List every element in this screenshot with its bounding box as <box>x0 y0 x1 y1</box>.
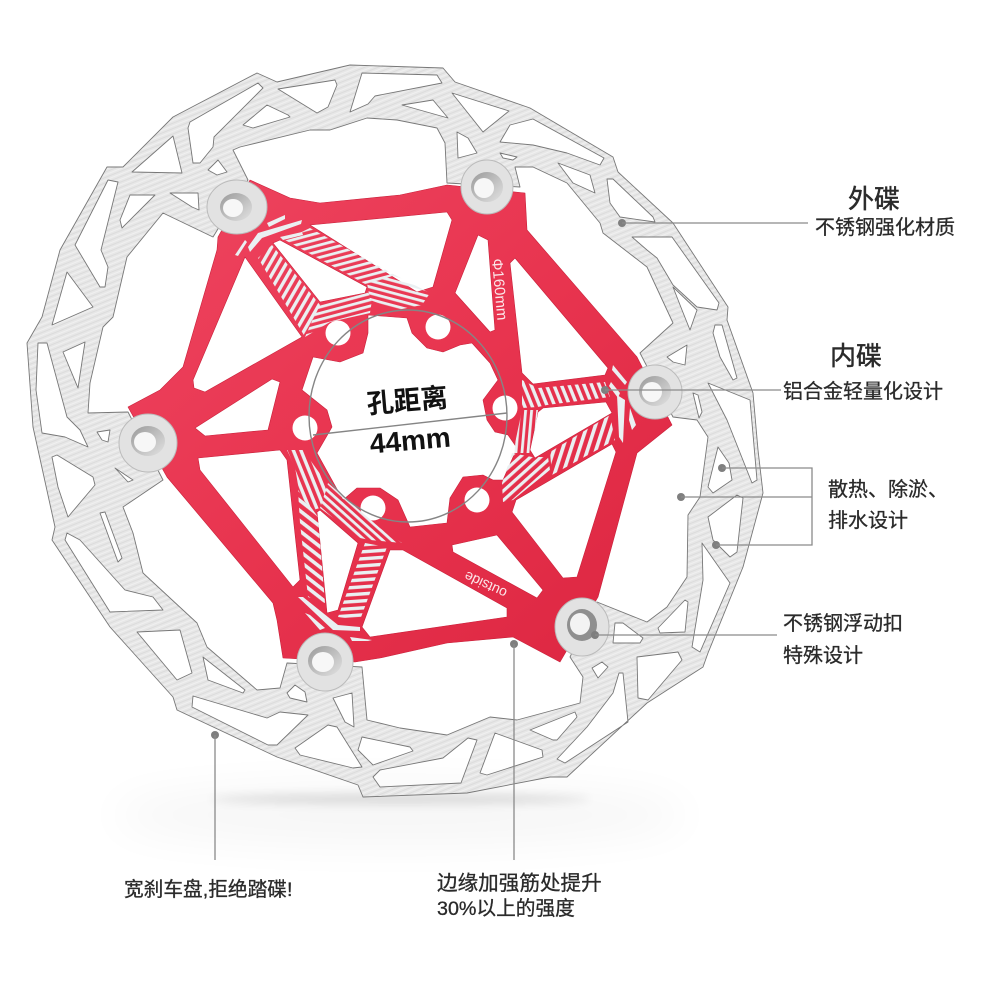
callout: floating rivet <box>591 612 903 667</box>
callout: reinforced rim: 边缘加强筋处提升 <box>437 872 602 895</box>
rivet left <box>119 414 177 472</box>
pitch circle <box>309 310 507 522</box>
hub spacing value: 44mm <box>369 422 452 460</box>
rivet right <box>628 365 682 419</box>
callout: wide braking surface: 宽刹车盘,拒绝踏碟! <box>124 879 292 901</box>
callout: inner disc <box>601 341 943 403</box>
hub spacing label: 孔距离 <box>366 383 449 420</box>
callout: reinforced rim <box>437 640 602 920</box>
diameter line <box>313 413 507 435</box>
callout: heat dissipation: 散热、除淤、 <box>828 478 948 501</box>
callout: outer disc: 外碟 <box>848 184 900 214</box>
carrier body <box>128 180 672 662</box>
hub bolt holes <box>292 314 518 520</box>
callout: inner disc: 铝合金轻量化设计 <box>783 380 943 403</box>
rivet bottom left <box>297 633 353 691</box>
callout: inner disc: 内碟 <box>830 341 882 371</box>
rivet top right <box>461 160 513 214</box>
rivet top left <box>207 180 267 234</box>
outer rotor ring <box>27 65 763 797</box>
hatched arms <box>235 215 636 641</box>
callout: reinforced rim: 30%以上的强度 <box>437 898 575 920</box>
engraved 160mm marking: Φ160mm <box>488 258 510 321</box>
callout: floating rivet: 特殊设计 <box>783 644 863 667</box>
hub spacing dimension <box>309 310 507 522</box>
ground shadow <box>110 785 690 845</box>
callout: heat dissipation: 排水设计 <box>828 509 908 532</box>
rivet bottom right <box>555 598 609 656</box>
engraved outside marking: outside <box>461 568 509 602</box>
callout: floating rivet: 不锈钢浮动扣 <box>783 612 903 635</box>
callout: heat dissipation <box>677 464 948 549</box>
floating rivets <box>119 160 682 691</box>
callout: wide braking surface <box>124 731 292 901</box>
callout: outer disc: 不锈钢强化材质 <box>815 216 955 239</box>
red inner carrier <box>128 180 672 662</box>
callout: outer disc <box>618 184 955 239</box>
